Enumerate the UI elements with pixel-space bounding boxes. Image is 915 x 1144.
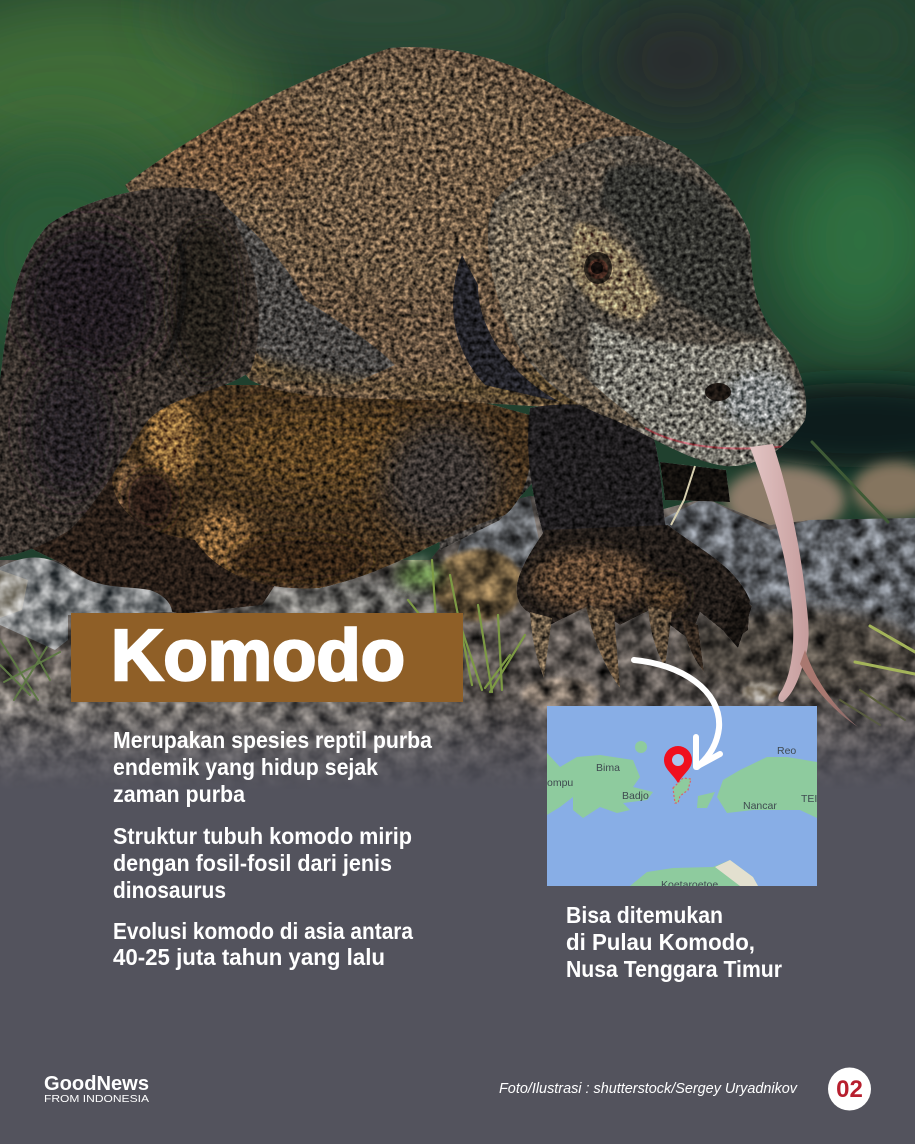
location caption: Bisa ditemukan: [566, 902, 723, 928]
komodo dragon: [0, 30, 820, 688]
page number badge: 02: [836, 1076, 863, 1103]
text block: fact 1: zaman purba: [113, 781, 245, 807]
text block: fact 3: [113, 918, 413, 970]
tongue: [750, 444, 858, 727]
map place labels: Koetaroetoe: [661, 879, 718, 891]
location caption: [566, 902, 782, 982]
map place labels: Nancar: [743, 800, 777, 812]
eye: [584, 252, 612, 284]
fade to slate panel: [0, 695, 915, 790]
slate panel: [0, 790, 915, 1144]
front left arm: [0, 188, 259, 557]
map place labels: Badjo: [622, 790, 649, 802]
location caption: di Pulau Komodo,: [566, 929, 755, 955]
blurred green background: [0, 0, 915, 640]
map place labels: Reo: [777, 745, 796, 757]
photo credit: Foto/Ilustrasi : shutterstock/Sergey Uryadnikov: [499, 1080, 798, 1097]
map place labels: ompu: [547, 777, 573, 789]
belly: [112, 385, 530, 588]
text block: fact 2: [113, 823, 412, 903]
island: Komodo with dashed border: [673, 778, 691, 803]
text block: fact 2: Struktur tubuh komodo mirip: [113, 823, 412, 849]
logo: GoodNews from Indonesia: [44, 1073, 149, 1105]
location caption: Nusa Tenggara Timur: [566, 956, 782, 982]
left foreground rock: [0, 557, 172, 650]
text block: fact 2: dinosaurus: [113, 877, 226, 903]
back and torso: [125, 47, 680, 406]
lower body shadow: [30, 430, 285, 614]
text block: fact 3: Evolusi komodo di asia antara: [113, 918, 413, 944]
front right leg: [528, 404, 668, 540]
page number badge: [828, 1068, 871, 1110]
text block: fact 2: dengan fosil-fosil dari jenis: [113, 850, 392, 876]
island: Sumba: [630, 860, 758, 886]
logo: GoodNews from Indonesia: FROM INDONESIA: [44, 1094, 149, 1105]
location map: [547, 706, 817, 891]
neck fold: [453, 255, 560, 402]
island: Rinca: [697, 792, 715, 808]
sandy area: [715, 860, 758, 886]
grass tufts: [0, 442, 915, 725]
curved arrow to map pin: [634, 660, 720, 767]
island: Sumbawa: [547, 753, 653, 818]
island: Flores: [717, 757, 817, 818]
text block: fact 1: endemik yang hidup sejak: [113, 754, 378, 780]
grass stem from mouth: [671, 466, 695, 525]
map place labels: Bima: [596, 762, 620, 774]
rocky ground: [0, 496, 915, 800]
text block: fact 1: [113, 727, 432, 807]
head: [488, 136, 806, 466]
map pin: [664, 746, 692, 783]
rear grey flank: [430, 415, 535, 550]
text block: fact 1: Merupakan spesies reptil purba: [113, 727, 432, 753]
title banner: [71, 613, 463, 702]
front right foot with claws: [517, 525, 752, 688]
map place labels: [547, 745, 817, 891]
logo: GoodNews from Indonesia: GoodNews: [44, 1073, 149, 1095]
map place labels: TEI: [801, 793, 817, 805]
nostril: [705, 383, 731, 401]
title banner: Komodo: [111, 616, 405, 696]
mouth line: [645, 428, 788, 449]
far hind leg behind head: [660, 462, 730, 502]
text block: fact 3: 40-25 juta tahun yang lalu: [113, 944, 385, 970]
island: Sangeang: [635, 741, 647, 753]
